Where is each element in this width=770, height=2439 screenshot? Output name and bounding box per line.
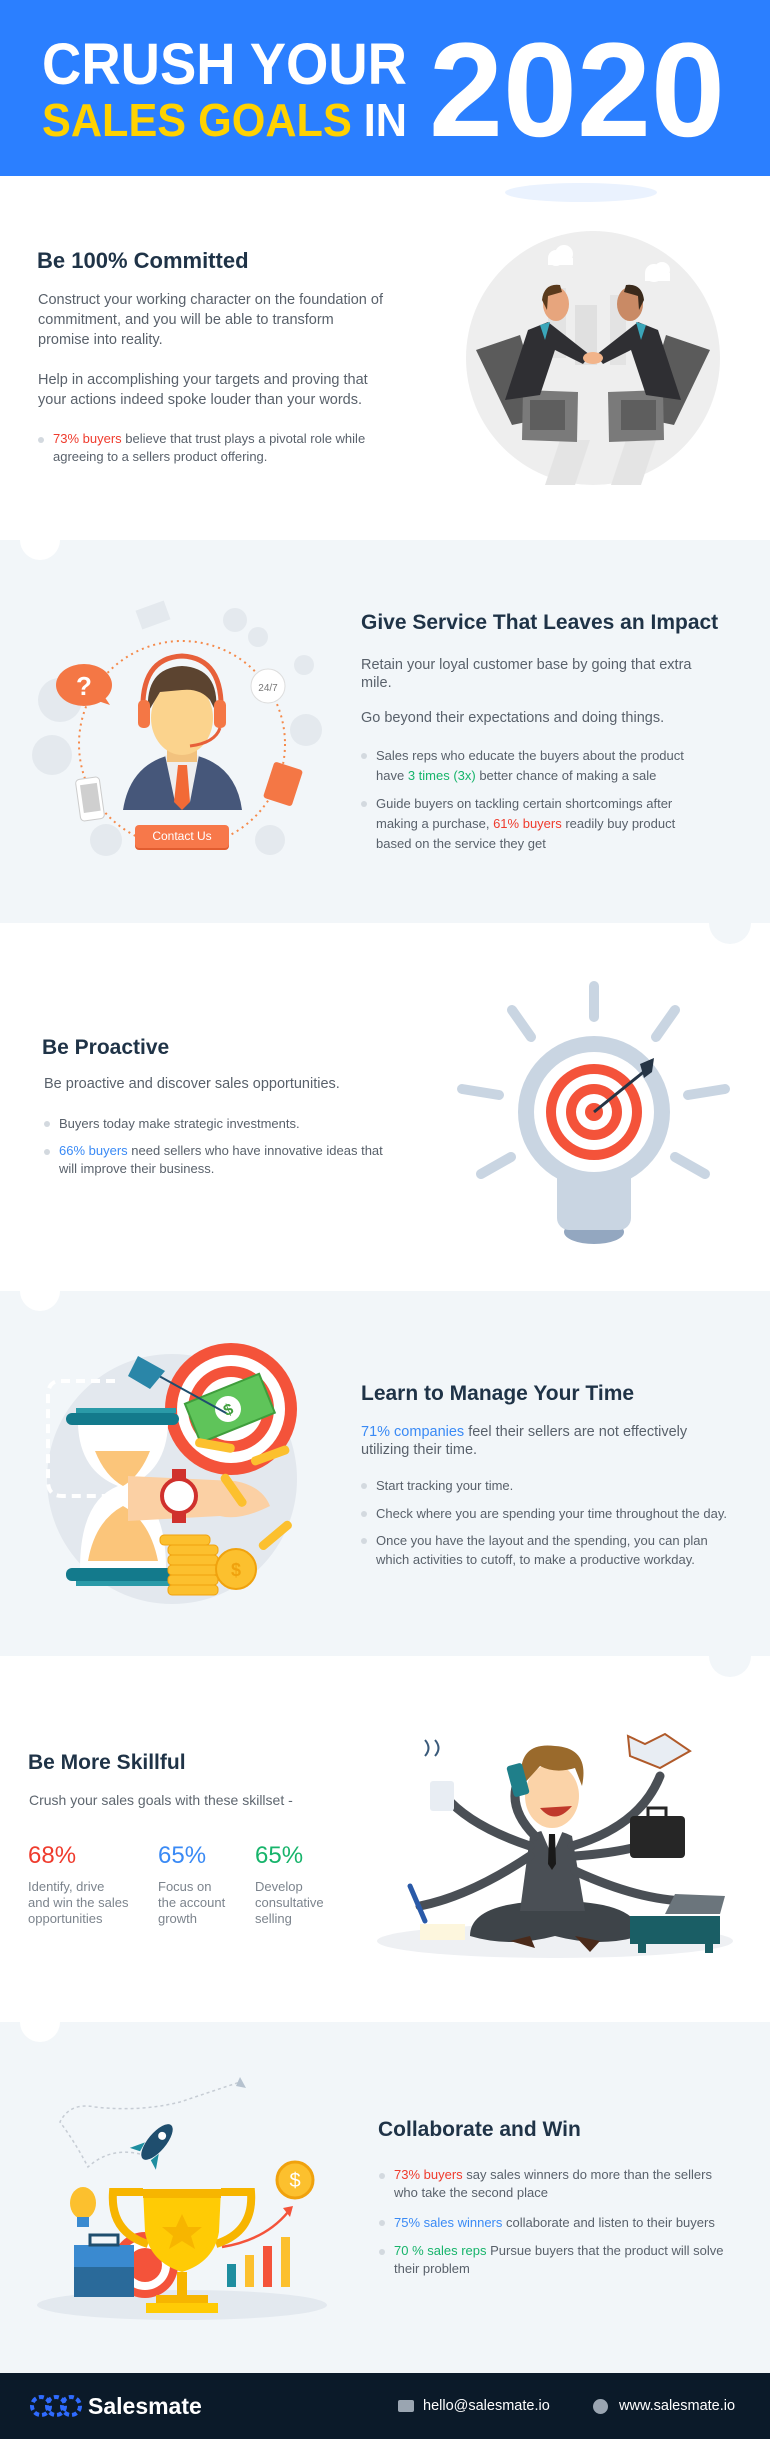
target <box>165 1343 297 1475</box>
pen and paper <box>420 1924 465 1940</box>
headset man <box>123 755 242 810</box>
panel: be 100% committed <box>0 176 770 540</box>
coins <box>160 1535 218 1595</box>
stat: 65% focus: the account <box>158 1895 225 1910</box>
icon: support agent illustration: ? <box>76 671 92 701</box>
bullet 1: Buyers today make strategic investments. <box>59 1116 300 1131</box>
icon: multitasking businessman <box>377 1732 733 1958</box>
left man <box>505 322 590 400</box>
panel: be proactive <box>0 923 770 1291</box>
24/7 <box>251 669 285 703</box>
text block: commitment, and you will be able to transform <box>38 312 334 328</box>
bullet 3 <box>379 2242 724 2278</box>
icon: support agent illustration <box>32 600 322 856</box>
notch <box>20 520 60 560</box>
bullet 3 <box>361 1531 708 1569</box>
text block 2: Help in accomplishing your targets and proving that <box>38 372 368 388</box>
title year: 2020 <box>429 16 725 165</box>
phone book <box>263 761 303 807</box>
heading: Learn to Manage Your Time <box>361 1382 634 1405</box>
text block 2: your actions indeed spoke louder than your words. <box>38 392 362 408</box>
bullet 2 <box>44 1142 383 1178</box>
icon: trophy illustration: $ <box>289 2170 301 2192</box>
stat: 65% develop: consultative <box>255 1895 324 1910</box>
bullet 1: who take the second place <box>394 2185 548 2200</box>
text block: promise into reality. <box>38 332 163 348</box>
text block <box>361 1424 687 1458</box>
text block 2 <box>38 372 368 408</box>
panel: give service <box>0 540 770 923</box>
stat: 68%: Identify, drive <box>28 1879 104 1894</box>
bullet 1 <box>379 2166 712 2202</box>
icon: trophy illustration <box>37 2077 327 2320</box>
bulb <box>70 2187 96 2219</box>
icon: handshake illustration <box>466 231 720 485</box>
bullet stat <box>38 430 365 466</box>
bullet 2: Check where you are spending your time throughout the day. <box>376 1506 727 1521</box>
hands <box>583 352 603 364</box>
bullet stat: 73% buyers believe that trust plays a pivotal role while <box>53 431 365 446</box>
laptop and table <box>630 1916 720 1944</box>
panel: be more skillful <box>0 1656 770 2022</box>
bullet 2: based on the service they get <box>376 836 546 851</box>
bullet 2 <box>361 794 675 854</box>
stat: 68% <box>28 1842 128 1926</box>
icon: support agent illustration: 24/7 <box>258 683 278 694</box>
money <box>185 1374 275 1443</box>
target <box>112 2232 178 2298</box>
bullet 3: 70 % sales reps Pursue buyers that the product will solve <box>394 2243 724 2258</box>
icon: time and money illustration: $ <box>231 1560 241 1580</box>
stat: 68%: opportunities <box>28 1911 102 1926</box>
text block: Construct your working character on the foundation of <box>38 292 383 308</box>
stat: 65% develop: selling <box>255 1911 292 1926</box>
briefcase <box>630 1816 685 1858</box>
bullet 2: making a purchase, 61% buyers readily buy product <box>376 816 675 831</box>
stat: 65% focus <box>158 1842 226 1926</box>
heading: Be More Skillful <box>28 1751 186 1774</box>
stat: 65% focus: growth <box>158 1911 197 1926</box>
mug <box>430 1781 454 1811</box>
book <box>628 1734 690 1768</box>
bullet 1 <box>361 746 684 786</box>
hand with watch <box>128 1476 270 1521</box>
stat: 65% develop: Develop <box>255 1879 303 1894</box>
stat: 68%: and win the sales <box>28 1895 128 1910</box>
button: contact us: Contact Us <box>152 829 212 843</box>
text block: Crush your sales goals with these skillset - <box>29 1792 293 1808</box>
stat: 68%: 68% <box>28 1842 76 1869</box>
bullet 2: 75% sales winners collaborate and listen to their buyers <box>394 2215 715 2230</box>
bullet 2: 66% buyers need sellers who have innovative ideas that <box>59 1143 383 1158</box>
bars <box>227 2264 236 2287</box>
notch <box>20 1271 60 1311</box>
icon: logo mark <box>30 2395 82 2417</box>
bullet 1: have 3 times (3x) better chance of making a sale <box>376 768 656 783</box>
phone <box>75 777 105 821</box>
decorative ellipse <box>505 183 657 202</box>
arrow <box>150 1371 226 1413</box>
stat: 65% focus: Focus on <box>158 1879 211 1894</box>
bullet 1: Start tracking your time. <box>376 1478 513 1493</box>
head <box>525 1764 579 1828</box>
header banner <box>0 0 770 176</box>
hourglass <box>78 1425 168 1569</box>
icon: time and money illustration <box>46 1343 297 1604</box>
trophy <box>113 2192 148 2244</box>
bullet 1: 73% buyers say sales winners do more than the sellers <box>394 2167 712 2182</box>
heading: Be Proactive <box>42 1036 169 1059</box>
right laptop <box>641 335 710 425</box>
title line 1: CRUSH YOUR <box>42 32 407 97</box>
text block 2: Go beyond their expectations and doing things. <box>361 710 664 726</box>
bullet stat: agreeing to a sellers product offering. <box>53 449 267 464</box>
torso <box>520 1830 585 1911</box>
stat: 65% develop: 65% <box>255 1842 303 1869</box>
footer <box>0 2373 770 2439</box>
bullet 3: their problem <box>394 2261 470 2276</box>
money: $ <box>221 1401 236 1420</box>
bullet 1: Sales reps who educate the buyers about the product <box>376 748 684 763</box>
text block: mile. <box>361 675 392 691</box>
contact email: hello@salesmate.io <box>423 2398 550 2414</box>
briefcase <box>74 2245 134 2297</box>
heading: Be 100% Committed <box>37 248 249 273</box>
text block: Retain your loyal customer base by going that extra <box>361 657 691 673</box>
speech bubble <box>56 664 112 706</box>
panel: manage your time <box>0 1291 770 1656</box>
heading: Give Service That Leaves an Impact <box>361 611 718 634</box>
phone <box>506 1762 530 1798</box>
bullet 3: Once you have the layout and the spending, you can plan <box>376 1533 708 1548</box>
stat: 65% develop <box>255 1842 324 1926</box>
text block <box>38 292 384 348</box>
panel: collaborate and win <box>0 2022 770 2373</box>
notch <box>20 2002 60 2042</box>
legs <box>470 1901 640 1942</box>
arms <box>420 1776 690 1906</box>
coin <box>277 2162 313 2198</box>
logo <box>30 2393 202 2419</box>
left laptop <box>476 335 545 425</box>
right man <box>596 322 681 400</box>
bullet 2: Guide buyers on tackling certain shortcomings after <box>376 796 672 811</box>
bullet 2: will improve their business. <box>59 1161 214 1176</box>
text block <box>361 657 692 691</box>
website: www.salesmate.io <box>619 2398 735 2414</box>
notch <box>709 902 751 944</box>
title line 2: SALES GOALS IN <box>42 94 407 146</box>
text block: Be proactive and discover sales opportunities. <box>44 1076 340 1092</box>
bullet 3: which activities to cutoff, to make a productive workday. <box>376 1552 695 1567</box>
heading: Collaborate and Win <box>378 2118 581 2141</box>
text block: 71% companies feel their sellers are not effectively <box>361 1424 687 1440</box>
stat: 65% focus: 65% <box>158 1842 206 1869</box>
rocket <box>130 2114 184 2170</box>
button: contact us <box>135 825 229 848</box>
logo: Salesmate <box>88 2393 202 2419</box>
text block: utilizing their time. <box>361 1442 477 1458</box>
notch <box>709 1635 751 1677</box>
